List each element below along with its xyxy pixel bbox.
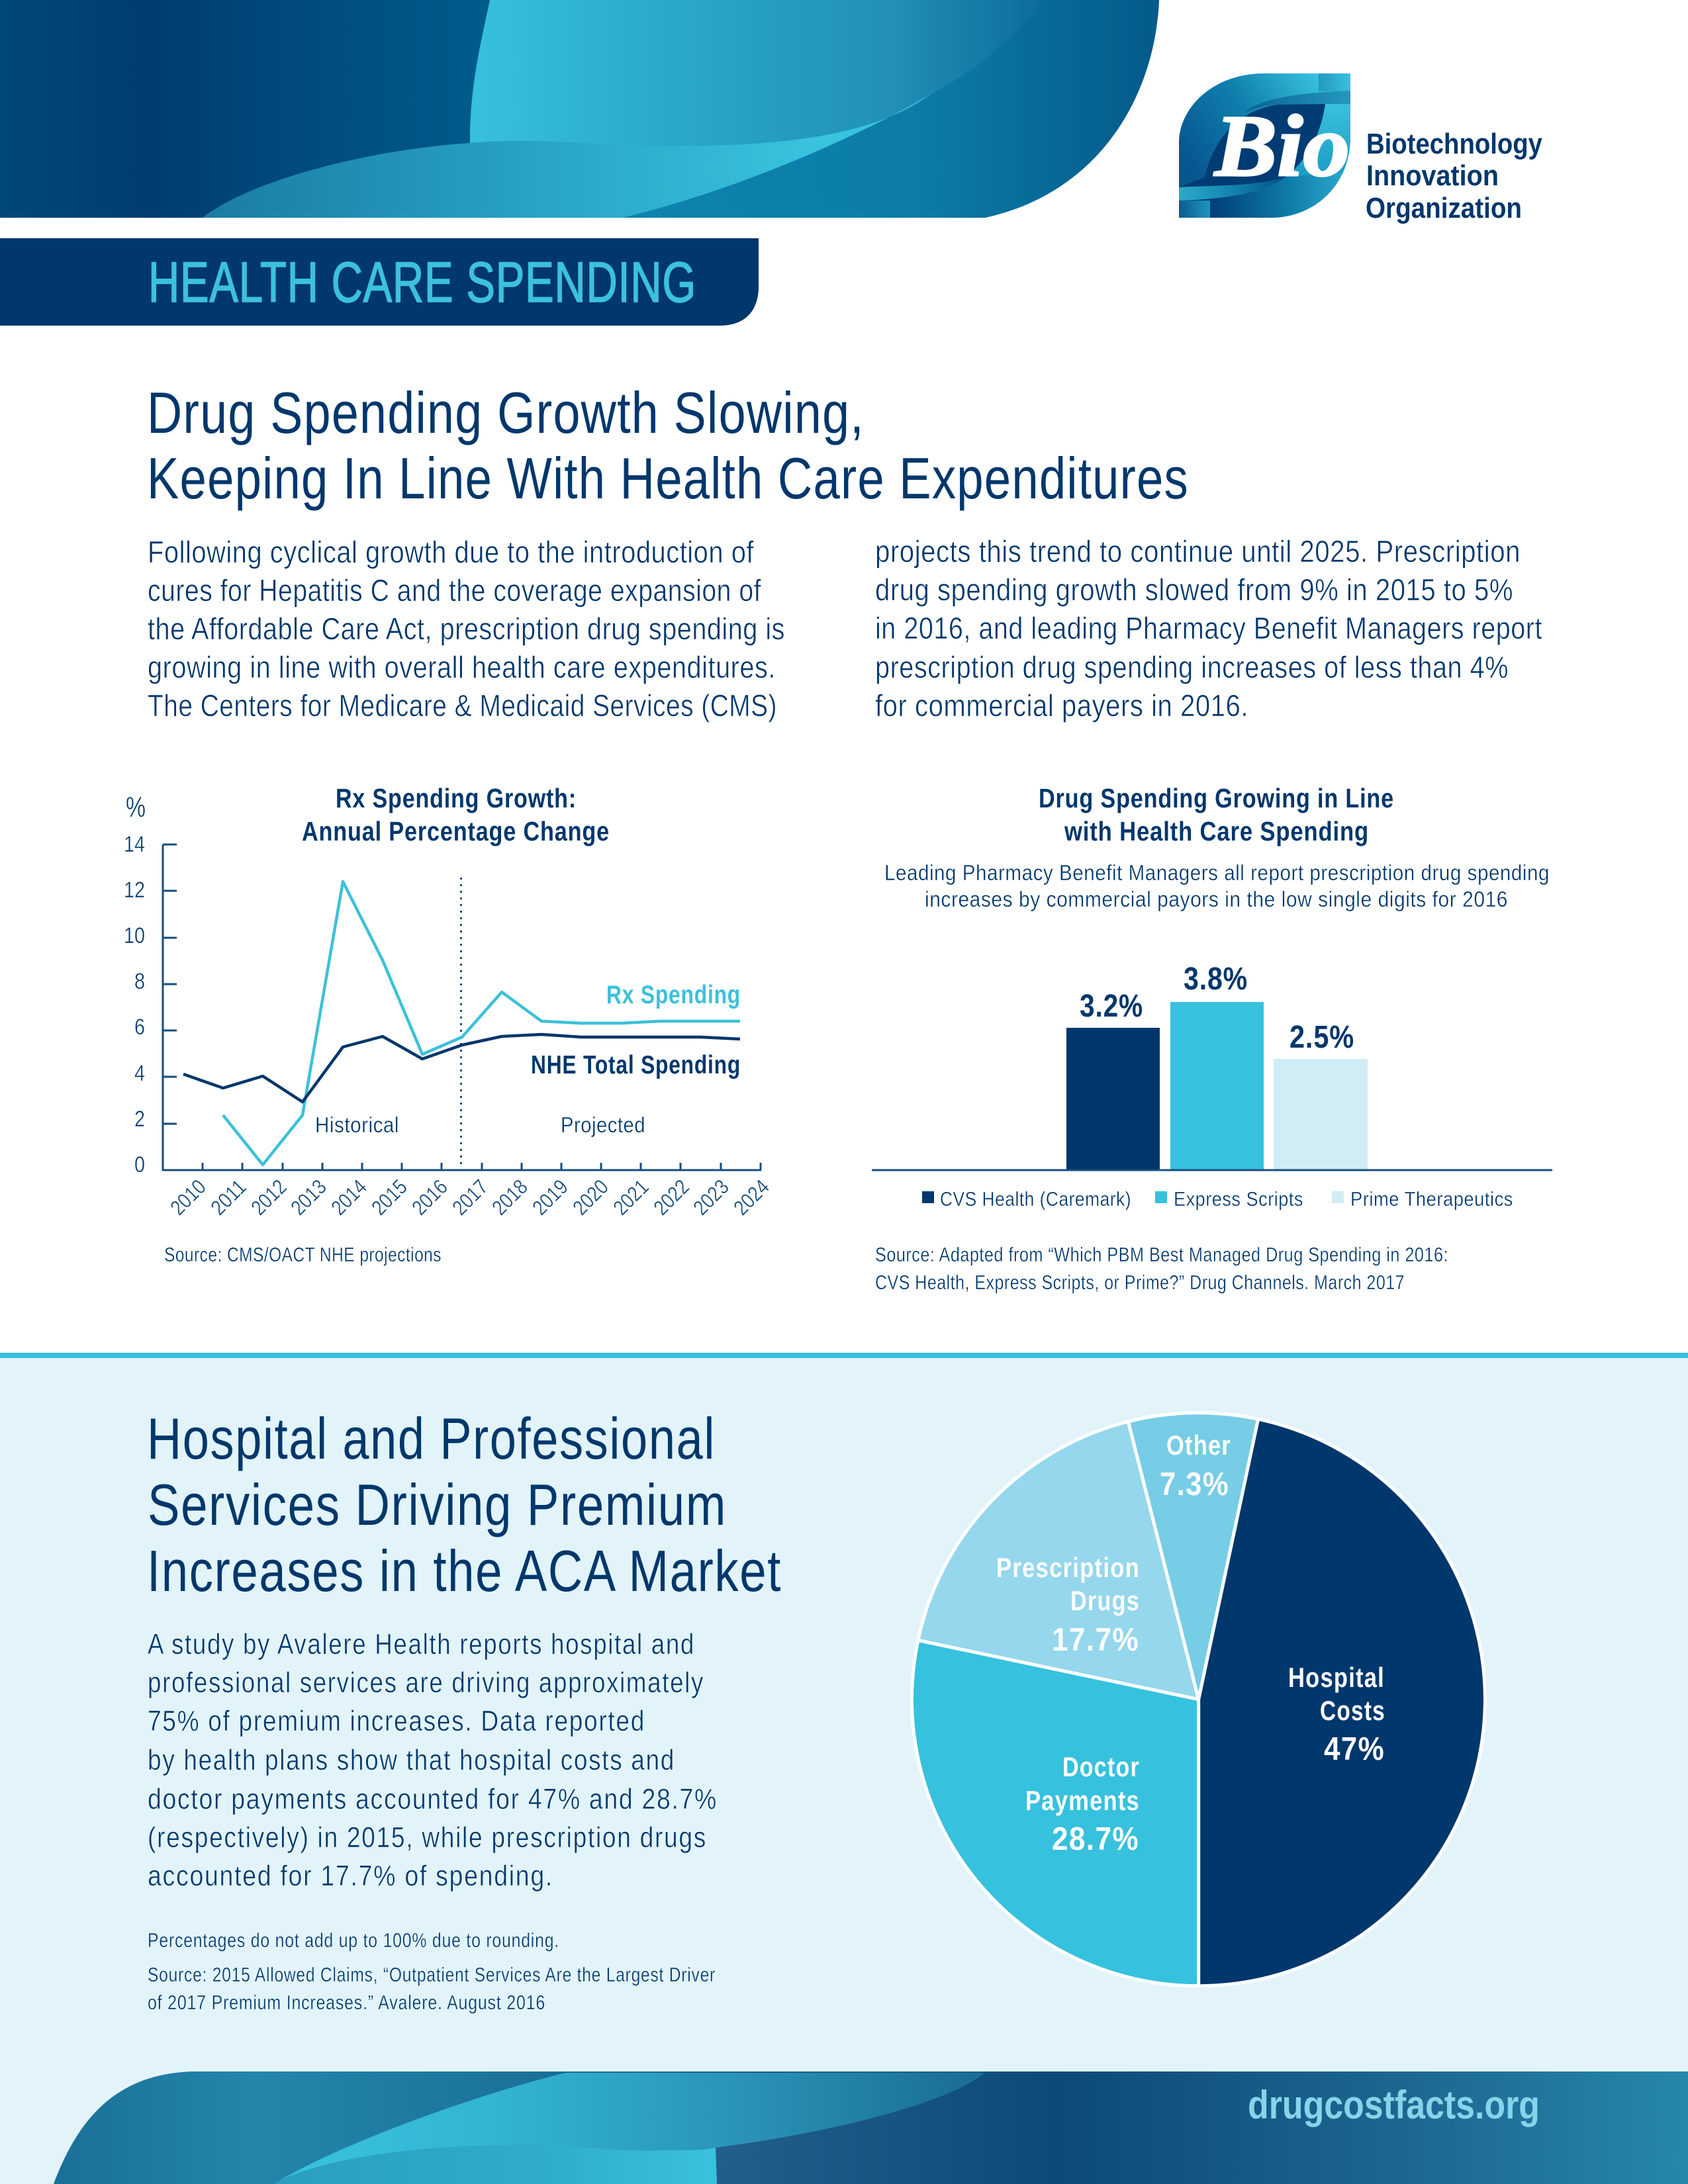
series: NHE total spending	[183, 1034, 740, 1102]
section heading: Hospital and Professional	[147, 1406, 716, 1471]
slice: prescription drugs	[918, 1422, 1199, 1700]
pie label: prescription drugs: 17.7%	[1052, 1622, 1139, 1658]
y axis labels: 8	[134, 969, 145, 994]
main heading: Drug Spending Growth Slowing,	[147, 380, 865, 445]
chart subtitle	[884, 860, 1550, 911]
x axis labels: 2019	[528, 1175, 573, 1220]
intro text right column: prescription drug spending increases of less than 4%	[875, 650, 1509, 684]
y axis	[163, 844, 177, 1171]
section source	[148, 1963, 716, 2014]
pie label: prescription drugs	[996, 1552, 1140, 1658]
pie label: prescription drugs: Prescription	[996, 1552, 1140, 1583]
chart title: Drug Spending Growing in Line	[1039, 783, 1394, 813]
series: rx spending	[223, 882, 740, 1165]
main heading	[147, 380, 1189, 511]
x axis labels: 2012	[246, 1175, 291, 1220]
main heading: Keeping In Line With Health Care Expenditures	[147, 445, 1189, 511]
intro text right column: in 2016, and leading Pharmacy Benefit Managers report	[875, 611, 1542, 645]
x axis labels: 2014	[326, 1175, 371, 1220]
chart title	[302, 783, 610, 846]
pie label: doctor payments: 28.7%	[1052, 1821, 1139, 1857]
y axis labels: 6	[134, 1015, 145, 1040]
historical/projected divider	[460, 878, 462, 1165]
chart source: Source: CMS/OACT NHE projections	[164, 1243, 442, 1266]
x axis labels: 2023	[688, 1175, 733, 1220]
intro text right column: for commercial payers in 2016.	[875, 688, 1248, 723]
footer lower ribbon	[275, 2145, 717, 2184]
pie label: hospital costs: 47%	[1324, 1731, 1385, 1767]
bar: Express Scripts	[1170, 962, 1264, 1169]
x axis labels	[165, 1175, 774, 1220]
y axis labels: 0	[134, 1152, 145, 1177]
x axis labels: 2022	[649, 1175, 694, 1220]
pie label: doctor payments: Payments	[1025, 1785, 1140, 1816]
y axis labels	[124, 832, 145, 1177]
chart source: CVS Health, Express Scripts, or Prime?” Drug Channels. March 2017	[875, 1271, 1405, 1294]
pie label: other: Other	[1166, 1430, 1231, 1461]
chart title: Rx Spending Growth:	[336, 783, 577, 813]
panel: lower section	[0, 1353, 1688, 2184]
chart title: with Health Care Spending	[1064, 816, 1369, 846]
chart title: Annual Percentage Change	[302, 816, 610, 846]
bar: Express Scripts: 3.8%	[1184, 962, 1248, 997]
x axis labels: 2021	[608, 1175, 653, 1220]
header base shape	[0, 0, 1159, 218]
section background	[0, 1358, 1688, 2184]
header navy wedge	[0, 0, 490, 218]
legend: CVS Health (Caremark)	[940, 1187, 1131, 1210]
x axis labels: 2010	[165, 1175, 211, 1220]
x axis labels: 2011	[206, 1175, 251, 1220]
chart subtitle: Leading Pharmacy Benefit Managers all report prescription drug spending	[884, 860, 1550, 885]
legend: Express Scripts	[1174, 1187, 1303, 1210]
x axis labels: 2017	[447, 1175, 492, 1220]
panel: line chart	[124, 783, 774, 1266]
series label: NHE Total Spending: NHE Total Spending	[531, 1051, 741, 1079]
slice: other	[1128, 1413, 1258, 1700]
rounding note: Percentages do not add up to 100% due to rounding.	[148, 1929, 559, 1952]
section body text: professional services are driving approximately	[148, 1666, 704, 1699]
x axis labels: 2020	[568, 1175, 613, 1220]
section body text: doctor payments accounted for 47% and 28.7%	[148, 1783, 718, 1815]
section divider	[0, 1353, 1688, 1358]
intro text left column	[148, 535, 785, 723]
pie label: doctor payments: Doctor	[1062, 1751, 1140, 1782]
section heading: Increases in the ACA Market	[147, 1538, 782, 1604]
bar: CVS Health: 3.2%	[1080, 989, 1143, 1024]
footer artwork	[54, 2071, 1688, 2184]
section body text: 75% of premium increases. Data reported	[148, 1705, 645, 1737]
intro text left column: growing in line with overall health care expenditures.	[148, 650, 776, 684]
intro text right column: drug spending growth slowed from 9% in 2015 to 5%	[875, 572, 1513, 607]
header upper ribbon	[470, 0, 1042, 153]
y axis labels: 14	[124, 832, 145, 857]
footer base wave	[54, 2071, 1688, 2184]
slice: doctor payments	[912, 1640, 1199, 1986]
section heading: Services Driving Premium	[148, 1472, 727, 1537]
section heading	[147, 1406, 782, 1604]
y axis labels: 10	[124, 923, 145, 948]
bar axis	[872, 1169, 1552, 1171]
intro text left column: Following cyclical growth due to the introduction of	[148, 535, 754, 569]
header artwork	[0, 0, 1159, 218]
header right wave	[463, 0, 1159, 218]
x axis labels: 2024	[729, 1175, 774, 1220]
section body text: A study by Avalere Health reports hospital and	[148, 1628, 695, 1661]
pie label: hospital costs	[1288, 1662, 1385, 1767]
section body text: by health plans show that hospital costs and	[148, 1744, 675, 1776]
series label: Rx Spending: Rx Spending	[606, 981, 741, 1009]
organization name: Innovation	[1366, 159, 1499, 192]
chart title	[1039, 783, 1394, 846]
pie label: other: 7.3%	[1160, 1467, 1229, 1502]
header lower ribbon	[203, 94, 931, 218]
label: Projected: Projected	[561, 1113, 645, 1137]
legend: Prime Therapeutics	[1350, 1187, 1513, 1210]
section body text: accounted for 17.7% of spending.	[148, 1860, 553, 1892]
chart subtitle: increases by commercial payors in the low single digits for 2016	[925, 887, 1508, 911]
intro text left column: cures for Hepatitis C and the coverage expansion of	[148, 573, 761, 608]
y axis unit: %	[126, 791, 146, 823]
organization name: Biotechnology	[1366, 128, 1542, 160]
bar: Prime Therapeutics	[1274, 1020, 1368, 1169]
y axis labels: 12	[124, 878, 145, 903]
pie label: hospital costs: Costs	[1320, 1695, 1385, 1726]
section source: Source: 2015 Allowed Claims, “Outpatient Services Are the Largest Driver	[148, 1963, 716, 1986]
intro text right column: projects this trend to continue until 2025. Prescription	[875, 534, 1521, 569]
section source: of 2017 Premium Increases.” Avalere. August 2016	[148, 1991, 545, 2014]
section body text	[148, 1628, 718, 1892]
pie label: prescription drugs: Drugs	[1070, 1585, 1140, 1616]
pie label: doctor payments	[1025, 1751, 1140, 1857]
footer url: drugcostfacts.org	[1248, 2083, 1540, 2127]
section banner	[0, 238, 759, 326]
chart source	[875, 1243, 1448, 1294]
bar: CVS Health	[1066, 989, 1160, 1169]
x axis labels: 2015	[367, 1175, 412, 1220]
label: Historical: Historical	[315, 1113, 399, 1137]
y axis labels: 4	[134, 1061, 145, 1086]
pie label: hospital costs: Hospital	[1288, 1662, 1385, 1693]
y axis labels: 2	[134, 1107, 145, 1132]
organization name	[1366, 128, 1542, 224]
footer upper ribbon	[275, 2073, 985, 2184]
x axis labels: 2016	[407, 1175, 452, 1220]
logo mark	[1179, 73, 1350, 218]
slice: hospital costs	[1199, 1419, 1485, 1986]
intro text left column: the Affordable Care Act, prescription drug spending is	[148, 612, 785, 646]
logo wordmark Bio: Bio	[1213, 97, 1350, 195]
banner title: HEALTH CARE SPENDING	[148, 251, 696, 314]
chart source: Source: Adapted from “Which PBM Best Managed Drug Spending in 2016:	[875, 1243, 1448, 1266]
pie label: other	[1160, 1430, 1231, 1502]
pie chart	[912, 1413, 1485, 1986]
intro text left column: The Centers for Medicare & Medicaid Services (CMS)	[148, 688, 777, 723]
bar: Prime Therapeutics: 2.5%	[1289, 1020, 1354, 1055]
organization name: Organization	[1366, 192, 1522, 224]
logo	[1179, 73, 1542, 224]
x axis labels: 2013	[286, 1175, 331, 1220]
legend	[922, 1187, 1513, 1210]
panel: bar chart	[872, 783, 1552, 1294]
section body text: (respectively) in 2015, while prescription drugs	[148, 1821, 707, 1854]
intro text right column	[875, 534, 1542, 723]
x axis	[163, 1163, 761, 1170]
x axis labels: 2018	[487, 1175, 532, 1220]
footer left wave	[54, 2071, 985, 2184]
